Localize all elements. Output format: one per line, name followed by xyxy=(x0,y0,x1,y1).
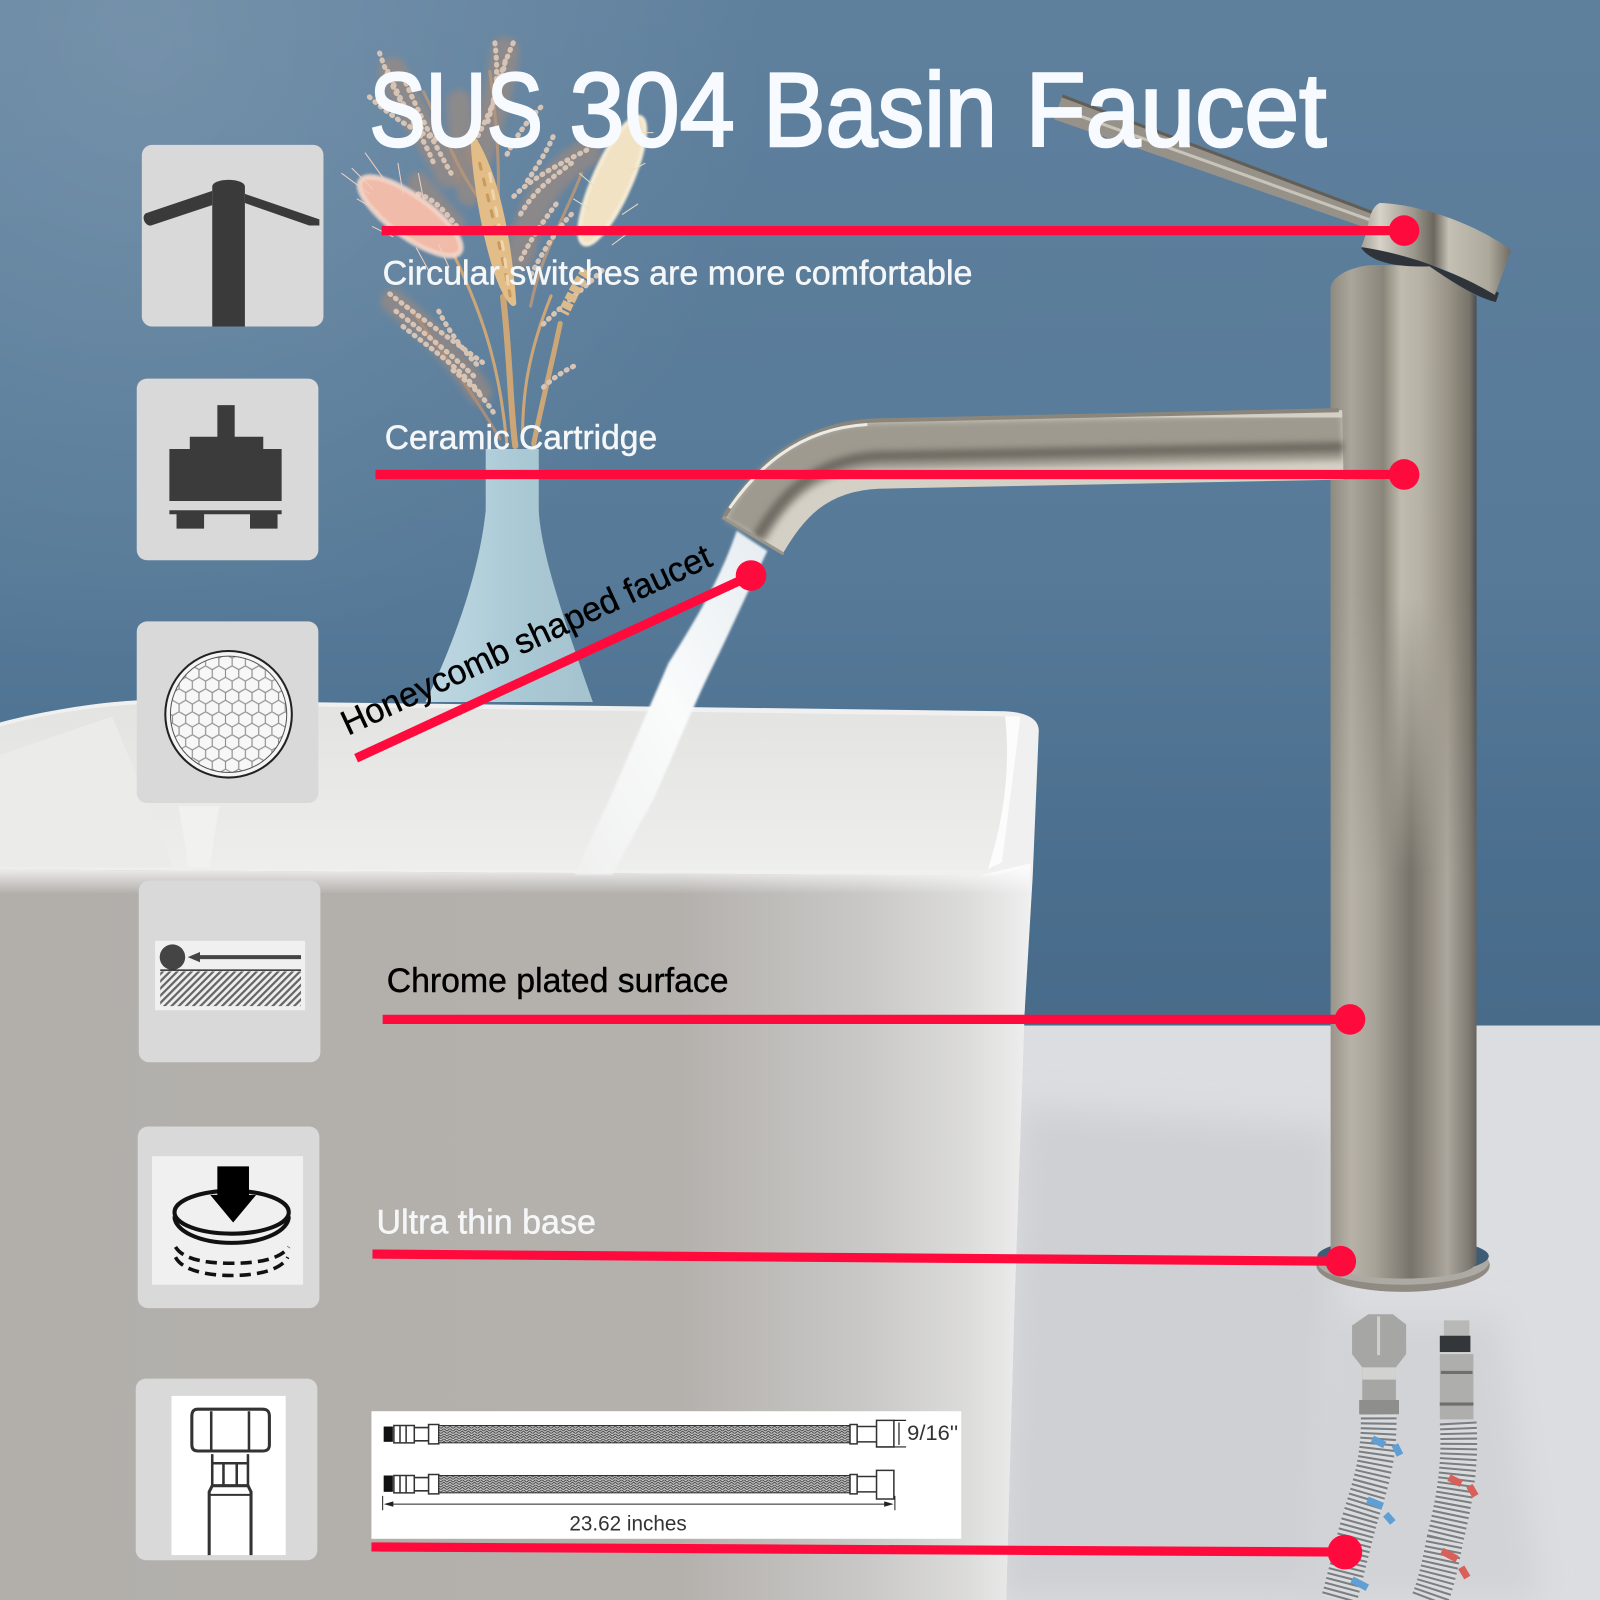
title: 304 xyxy=(569,52,735,169)
faucet xyxy=(722,96,1511,1600)
faucet reflection in the basin xyxy=(179,806,219,867)
panel: icon ultra thin base xyxy=(138,1127,319,1308)
icon: honeycomb circle xyxy=(165,651,292,778)
basin right inner wall xyxy=(988,716,1020,869)
icon: ball on smooth surface xyxy=(160,944,301,1006)
basin front face xyxy=(0,863,1031,1600)
wash basin xyxy=(0,700,1039,1600)
callout: chrome surface xyxy=(383,1004,1365,1035)
dimension arrow xyxy=(383,1496,895,1510)
water stream xyxy=(574,531,767,874)
cream bunny tail xyxy=(567,110,657,251)
callout: honeycomb xyxy=(356,560,766,758)
callout: switch xyxy=(382,215,1419,246)
background: countertop xyxy=(1000,1026,1600,1600)
label: circular switches: Circular switches are more comfortable xyxy=(383,255,972,293)
inner left wall shading xyxy=(0,716,173,867)
stems xyxy=(408,71,582,446)
basin interior xyxy=(0,704,1010,869)
connection hose: blue xyxy=(1339,1314,1406,1600)
icon: cartridge xyxy=(169,405,282,529)
panel: icon ceramic cartridge xyxy=(137,379,318,560)
connection hose: red xyxy=(1430,1320,1476,1600)
vase xyxy=(426,449,593,702)
panel: icon chrome surface xyxy=(139,881,320,1062)
callout: hose xyxy=(371,1535,1362,1569)
base plate xyxy=(1316,1238,1490,1292)
label: ceramic cartridge: Ceramic Cartridge xyxy=(385,419,657,457)
speckled dried sprigs xyxy=(369,43,602,413)
pink bunny tail xyxy=(342,153,472,270)
hose dimension diagram xyxy=(371,1411,961,1539)
dried flower bouquet xyxy=(342,43,657,446)
panel: icon circular switch xyxy=(142,145,323,327)
spout tube xyxy=(722,410,1343,554)
hose drawing: top xyxy=(384,1420,906,1447)
callout lines and dots xyxy=(356,215,1419,1569)
panel: icon hose connector xyxy=(136,1379,317,1560)
circular switch xyxy=(1361,203,1511,302)
wheat ear xyxy=(473,140,513,303)
speckle mass shading xyxy=(393,51,587,393)
thread size label: 9/16'' xyxy=(907,1421,958,1445)
callout: base xyxy=(372,1246,1356,1277)
label: chrome plated surface: Chrome plated surface xyxy=(387,962,729,1000)
hose length label: 23.62 inches xyxy=(569,1512,687,1536)
icon: hex nut and tube xyxy=(192,1409,269,1555)
label: honeycomb faucet: Honeycomb shaped faucet xyxy=(335,538,718,743)
panel: icon honeycomb aerator xyxy=(137,621,318,803)
basin outer xyxy=(0,700,1039,1600)
background: blue wall xyxy=(0,0,1600,1031)
column body xyxy=(1331,265,1477,1279)
label: ultra thin base: Ultra thin base xyxy=(377,1204,596,1242)
lever handle xyxy=(1054,96,1374,229)
callout: cartridge xyxy=(376,459,1419,490)
title: SUS xyxy=(369,52,543,169)
icon: disk with down arrow xyxy=(174,1166,289,1276)
small wheat ear xyxy=(563,270,587,313)
icon: lever handle xyxy=(144,180,319,327)
title: Faucet xyxy=(1026,52,1327,169)
title: Basin xyxy=(763,52,997,169)
hose drawing: bottom xyxy=(384,1470,894,1499)
